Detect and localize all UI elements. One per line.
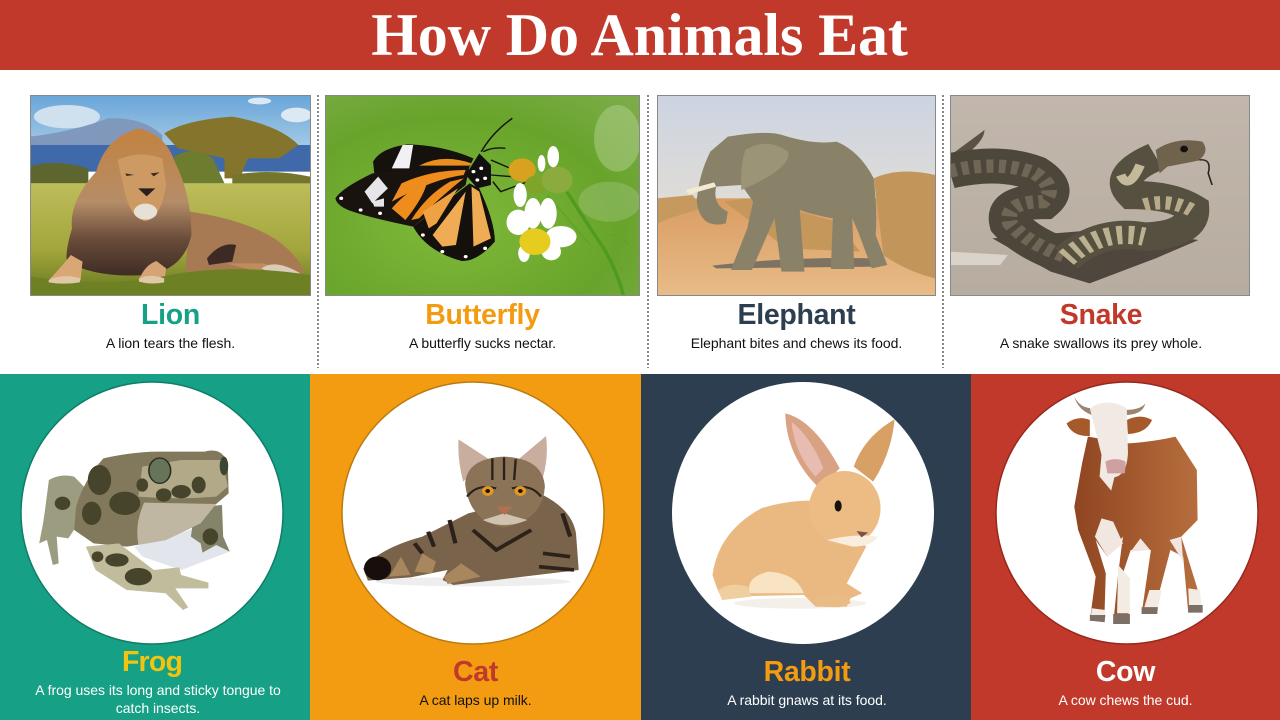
label: rabbit: Rabbit [764, 656, 850, 688]
photo: lion [30, 95, 312, 295]
circle: frog [21, 382, 283, 644]
photo: snake [950, 95, 1249, 295]
label: lion: A lion tears the flesh. [106, 335, 235, 351]
photo: butterfly [326, 95, 641, 295]
label: elephant: Elephant bites and chews its food. [691, 335, 902, 351]
label: snake [1000, 299, 1202, 351]
label: rabbit [727, 656, 887, 708]
label: cow [1058, 656, 1193, 708]
label: cat: A cat laps up milk. [419, 692, 532, 708]
dividers [318, 95, 943, 368]
label: frog: A frog uses its long and sticky tongue to catch insects. [35, 682, 281, 716]
panel backgrounds [0, 374, 1280, 720]
label: frog: Frog [122, 646, 182, 678]
label: rabbit: A rabbit gnaws at its food. [727, 692, 887, 708]
label: butterfly: Butterfly [425, 299, 540, 331]
circle: cow [996, 382, 1258, 644]
label: butterfly: A butterfly sucks nectar. [409, 335, 556, 351]
header band [0, 0, 1280, 70]
label: butterfly [409, 299, 556, 351]
label: lion [106, 299, 235, 351]
label: lion: Lion [141, 299, 200, 331]
label: snake: A snake swallows its prey whole. [1000, 335, 1202, 351]
photo: elephant [658, 95, 935, 295]
title: How Do Animals Eat [371, 2, 908, 68]
label: frog [35, 646, 281, 716]
label: cat: Cat [453, 656, 498, 688]
label: elephant [691, 299, 902, 351]
label: cat [419, 656, 532, 708]
label: cow: Cow [1096, 656, 1155, 688]
label: snake: Snake [1060, 299, 1142, 331]
circle: cat [342, 382, 604, 644]
label: cow: A cow chews the cud. [1058, 692, 1193, 708]
circle: rabbit [672, 382, 934, 644]
label: elephant: Elephant [738, 299, 855, 331]
